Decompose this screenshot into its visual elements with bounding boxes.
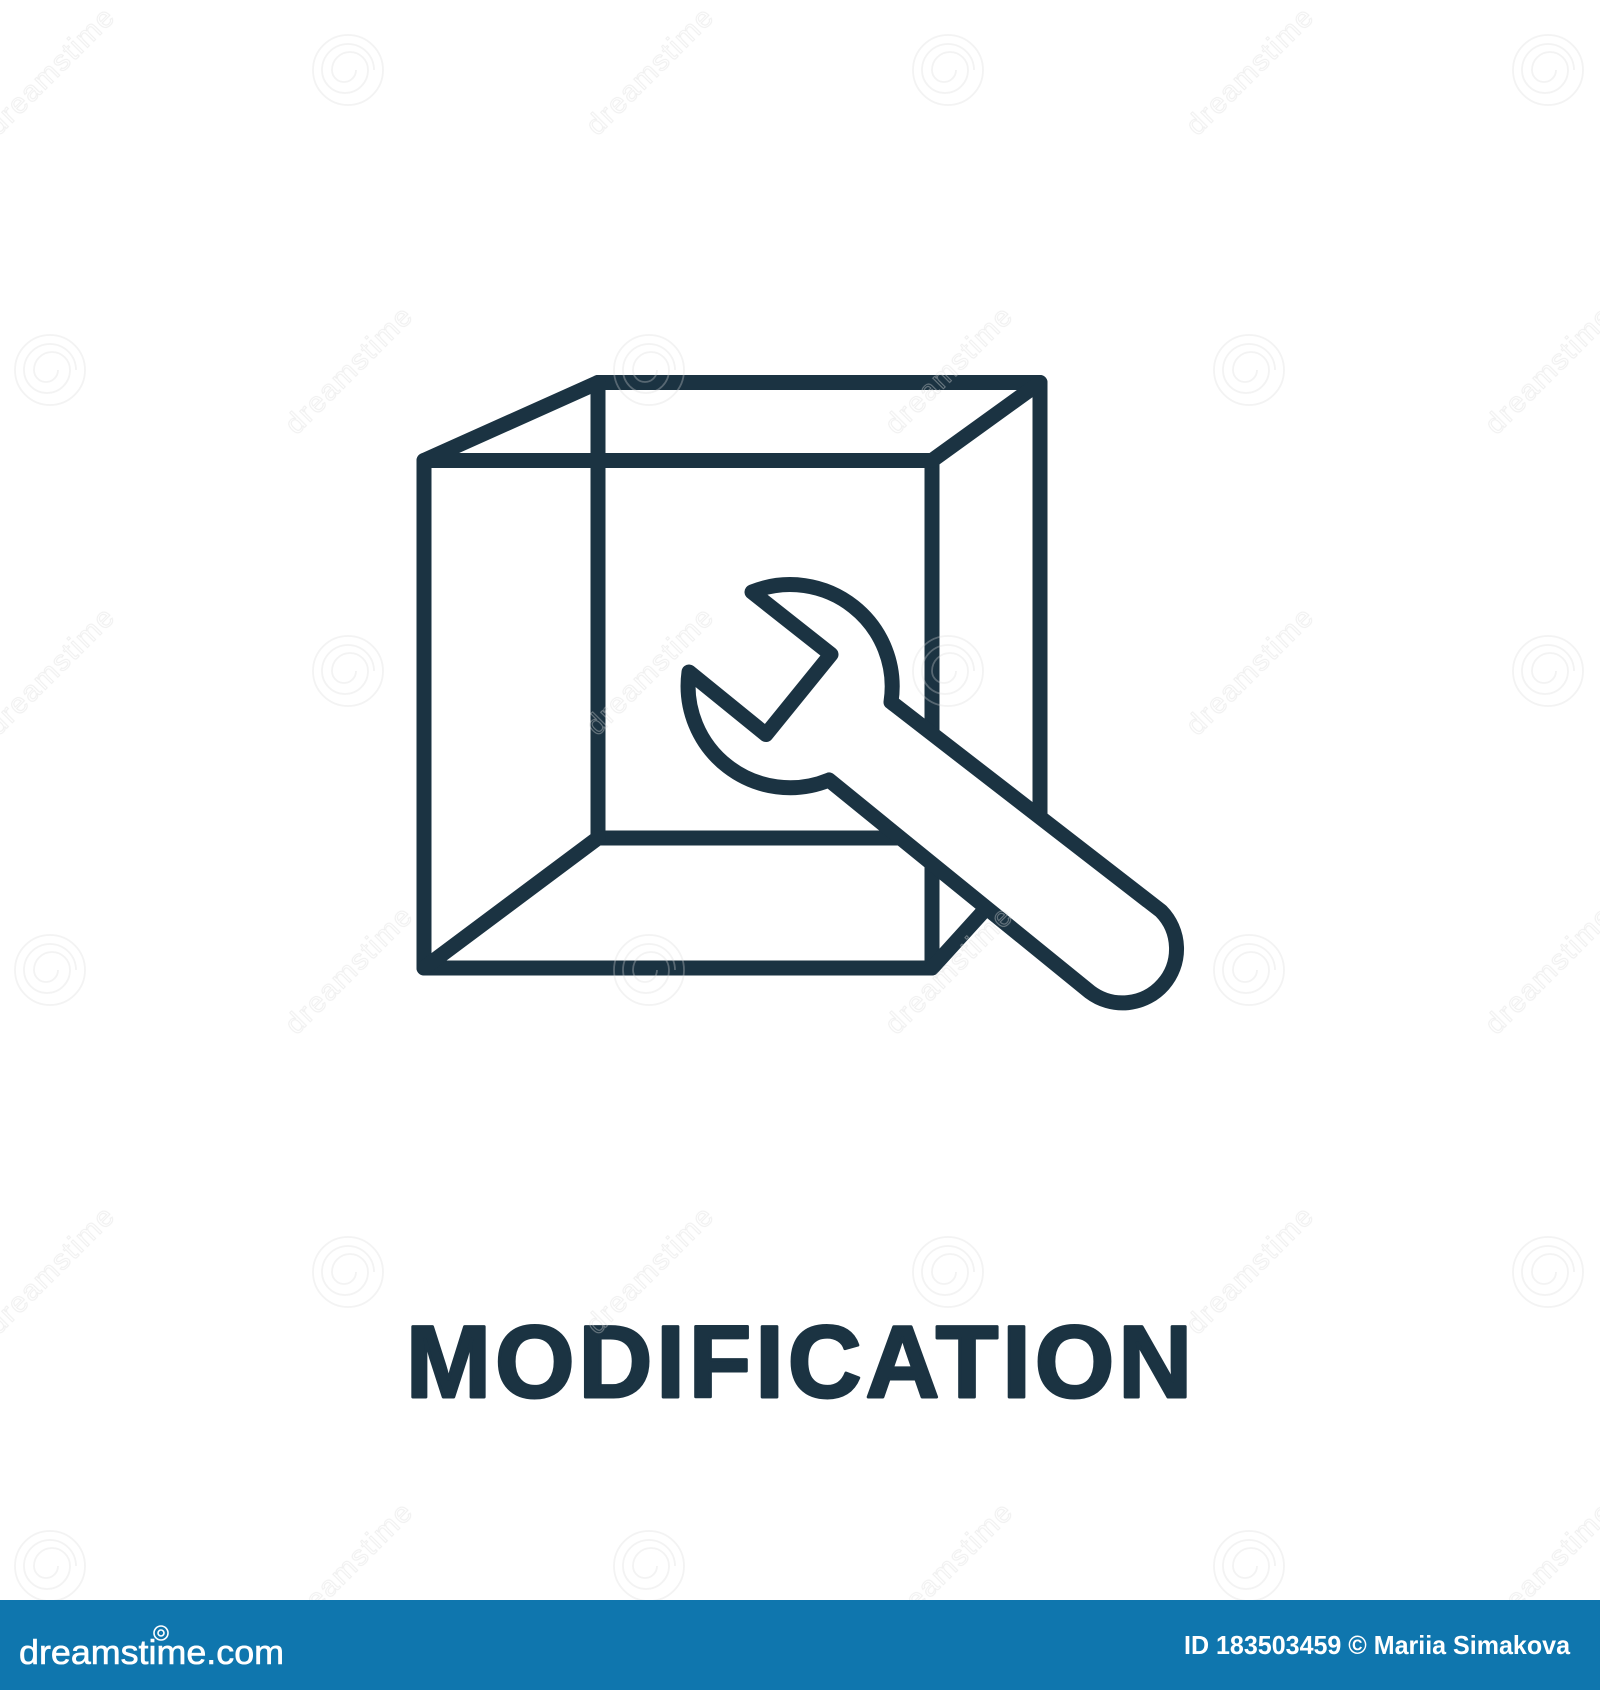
watermark diagonal text: dreamstime: [879, 1497, 1019, 1637]
title: MODIFICATION: [406, 1305, 1192, 1419]
watermark diagonal text: dreamstime: [279, 301, 419, 441]
footer bar: [0, 1600, 1600, 1690]
watermark diagonal text: dreamstime: [580, 1201, 720, 1341]
icon: wrench: [688, 585, 1177, 1003]
watermark diagonal text: dreamstime: [1180, 1201, 1320, 1341]
footer credit: ID 183503459 © Mariia Simakova: [1184, 1630, 1571, 1660]
watermark diagonal text: dreamstime: [879, 901, 1019, 1041]
cube outline: [424, 382, 1040, 968]
watermark diagonal text: dreamstime: [279, 901, 419, 1041]
watermark diagonal text: dreamstime: [580, 2, 720, 142]
footer logo: dreamstime.com: [19, 1634, 284, 1672]
watermark diagonal text: dreamstime: [1180, 602, 1320, 742]
watermark diagonal text: dreamstime: [879, 301, 1019, 441]
watermark diagonal text: dreamstime: [279, 1497, 419, 1637]
watermark diagonal text: dreamstime: [580, 602, 720, 742]
icon: cube with wrench: [424, 382, 1177, 1003]
icon: logo spiral: [154, 1626, 168, 1640]
watermark diagonal text: dreamstime: [1180, 2, 1320, 142]
